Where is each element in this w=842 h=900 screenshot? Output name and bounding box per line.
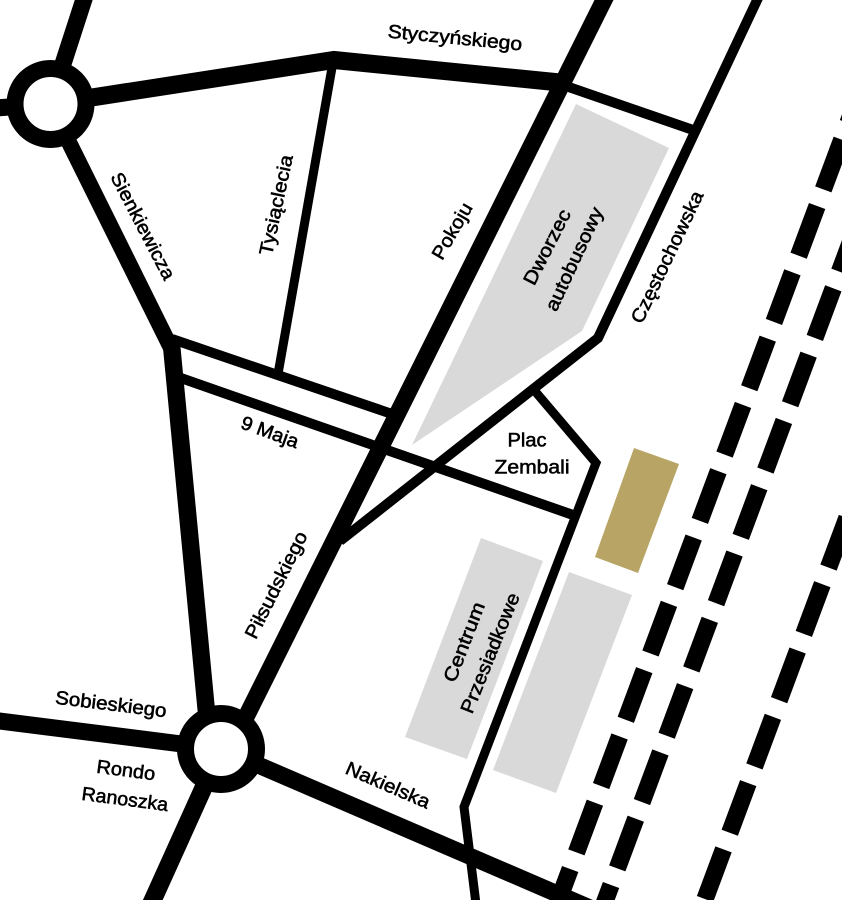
road: Nakielska (221, 749, 590, 900)
railway track 2 (594, 222, 842, 900)
label: autobusowy: autobusowy (542, 204, 608, 315)
label: Tysiąclecia: Tysiąclecia (256, 153, 298, 257)
label: Pokoju: Pokoju (428, 199, 477, 264)
roundabout north-west (15, 68, 86, 140)
label: Dworzec: Dworzec (520, 206, 576, 289)
label: Częstochowska: Częstochowska (627, 188, 709, 327)
road: Pokoju and Piłsudskiego (230, 0, 606, 749)
label: Piłsudskiego: Piłsudskiego (241, 528, 312, 642)
road: Sienkiewicza south section (172, 345, 210, 749)
building: railway station hall (493, 572, 632, 793)
label: Sobieskiego: Sobieskiego (54, 688, 168, 722)
road: Styczyńskiego east (560, 84, 696, 131)
road: Tysiąclecia (278, 62, 333, 374)
railway track 3 (694, 518, 842, 900)
road: Sobieskiego (0, 720, 221, 749)
building: transfer centre (405, 538, 543, 759)
label: Styczyńskiego: Styczyńskiego (387, 22, 523, 55)
roundabout Rondo Ranoszka (186, 714, 256, 784)
label: Przesiadkowe: Przesiadkowe (457, 590, 525, 717)
label: Sienkiewicza: Sienkiewicza (106, 169, 179, 284)
building: bus station (412, 104, 669, 445)
label: Zembali: Zembali (494, 458, 570, 478)
road: Częstochowska (340, 0, 759, 541)
label: Plac: Plac (508, 430, 546, 452)
label: Rondo: Rondo (95, 757, 156, 785)
railway track 1 (548, 73, 842, 900)
label: Centrum: Centrum (440, 599, 490, 685)
building: highlighted gold (595, 448, 679, 573)
road: Styczyńskiego (50, 60, 565, 104)
label: 9 Maja: 9 Maja (238, 413, 302, 453)
road: Sienkiewicza (50, 104, 172, 350)
road: north-west exit (50, 0, 85, 104)
road: west stub (0, 104, 50, 108)
road: south exit (151, 749, 221, 900)
road: 9 Maja upper (172, 339, 392, 414)
road: 9 Maja lower (178, 377, 576, 516)
road: Plac Zembali loop (464, 390, 596, 900)
label: Nakielska: Nakielska (342, 758, 433, 814)
label: Ranoszka: Ranoszka (80, 784, 170, 816)
